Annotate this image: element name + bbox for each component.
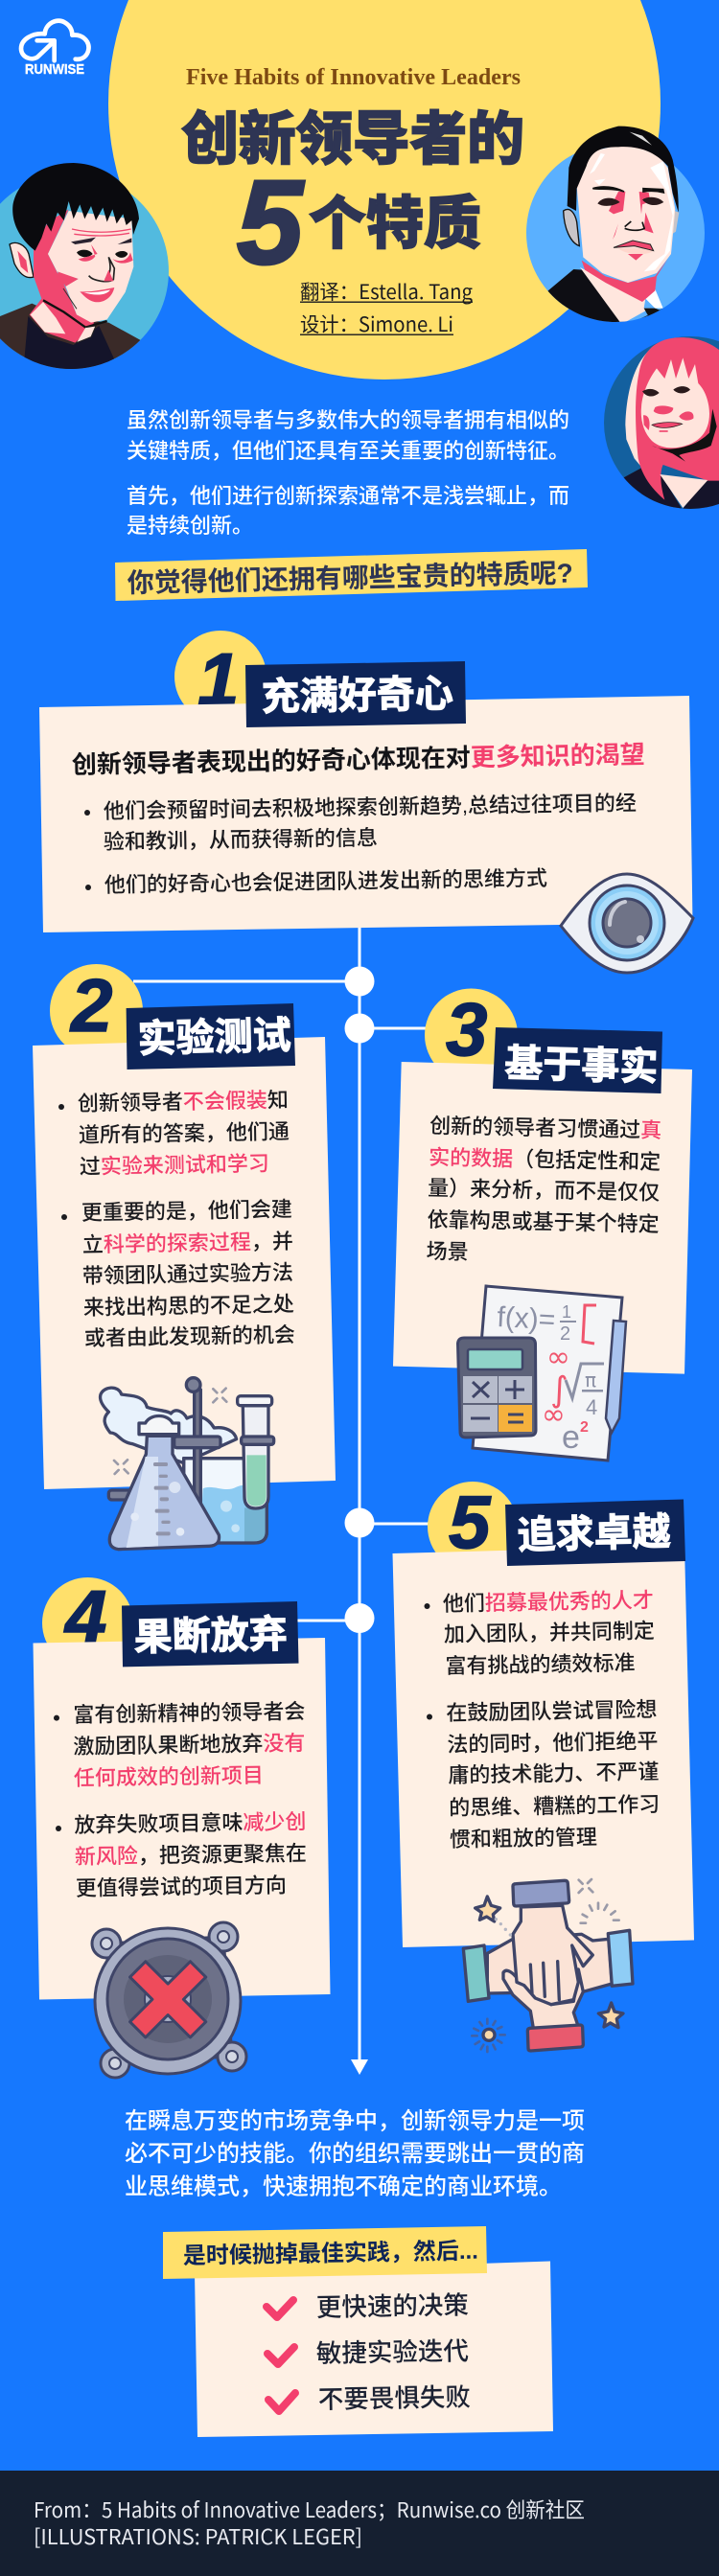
panel: habit 4 drop: 任何成效的创新项目 [74, 1763, 264, 1790]
panel: habit 5 excellence: 在鼓励团队尝试冒险想 [446, 1697, 658, 1725]
logo: Runwise [21, 21, 88, 78]
panel: habit 3 facts [393, 987, 692, 1460]
vertical timeline with nodes and arrow [133, 920, 429, 2075]
icon: eye [561, 874, 693, 973]
intro text: 是持续创新。 [127, 514, 253, 538]
panel: habit 2 experiment: 或者由此发现新的机会 [84, 1322, 295, 1350]
panel: habit 1 curiosity: 验和教训，从而获得新的信息 [104, 826, 378, 854]
panel: habit 4 drop [33, 1575, 330, 2078]
icon: formula sheet and calculator: π [585, 1368, 596, 1392]
icon: formula sheet and calculator: 1 [562, 1302, 571, 1322]
icon: formula sheet and calculator: 4 [586, 1395, 597, 1419]
panel: habit 2 experiment: 实验测试 [137, 1015, 291, 1061]
panel: habit 4 drop: 4 [63, 1575, 106, 1659]
icon: lab flask and test tube [101, 1378, 274, 1550]
panel: habit 3 facts: 量）来分析，而不是仅仅 [428, 1176, 660, 1205]
panel: habit 2 experiment: 创新领导者不会假装知 [78, 1088, 289, 1116]
footer: [ILLUSTRATIONS: PATRICK LEGER] [34, 2520, 362, 2551]
panel: habit 3 facts: 场景 [426, 1239, 469, 1264]
intro text: 虽然创新领导者与多数伟大的领导者拥有相似的 [127, 408, 569, 432]
panel: habit 5 excellence: 的思维、糟糕的工作习 [449, 1792, 660, 1820]
panel: habit 4 drop: 富有创新精神的领导者会 [73, 1699, 306, 1727]
intro text [127, 408, 569, 538]
panel: habit 5 excellence: 追求卓越 [517, 1511, 671, 1557]
closing text: 必不可少的技能。你的组织需要跳出一贯的商 [125, 2141, 585, 2167]
panel: habit 4 drop: 新风险，把资源更聚焦在 [75, 1841, 307, 1869]
panel: habit 3 facts: 3 [446, 987, 487, 1071]
panel: habit 5 excellence [393, 1480, 694, 2052]
panel: habit 3 facts: 实的数据（包括定性和定 [429, 1145, 661, 1174]
icon: formula sheet and calculator [458, 1286, 626, 1460]
panel: habit 1 curiosity: 1 [197, 637, 239, 722]
panel: habit 4 drop: 激励团队果断地放弃没有 [73, 1731, 306, 1759]
logo: Runwise: RUNWISE [25, 61, 84, 78]
panel: habit 4 drop: 果断放弃 [133, 1614, 288, 1659]
credits: 设计：Simone. Li [300, 310, 453, 338]
panel: habit 2 experiment: 立科学的探索过程，并 [82, 1230, 293, 1256]
credits: 翻译：Estella. Tang [300, 277, 473, 306]
panel: habit 3 facts: 依靠构思或基于某个特定 [427, 1208, 660, 1236]
portrait: left man [0, 163, 169, 381]
english subtitle: Five Habits of Innovative Leaders [186, 65, 521, 90]
icon: formula sheet and calculator: f(x)= [497, 1301, 556, 1336]
panel: habit 1 curiosity: 充满好奇心 [261, 674, 453, 719]
icon: formula sheet and calculator: ∞ [546, 1341, 570, 1374]
icon: formula sheet and calculator: e [562, 1419, 580, 1456]
panel: habit 5 excellence: 惯和粗放的管理 [450, 1825, 597, 1852]
intro text: 首先，他们进行创新探索通常不是浅尝辄止，而 [127, 484, 569, 508]
icon: speaker with red cross [92, 1922, 246, 2078]
title [181, 107, 524, 289]
panel: habit 2 experiment: 带领团队通过实验方法 [82, 1260, 293, 1288]
closing text: 业思维模式，快速拥抱不确定的商业环境。 [125, 2174, 562, 2200]
panel: habit 2 experiment: 2 [69, 963, 112, 1047]
panel: habit 5 excellence: 加入团队，并共同制定 [444, 1619, 655, 1646]
panel: checklist: 更快速的决策 [316, 2290, 469, 2322]
panel: habit 2 experiment: 更重要的是，他们会建 [81, 1197, 292, 1225]
portrait: center-right man [526, 126, 705, 322]
panel: habit 5 excellence: 法的同时，他们拒绝平 [447, 1729, 659, 1757]
portrait: lower-right woman [604, 336, 719, 516]
panel: habit 1 curiosity [39, 631, 693, 973]
panel: habit 3 facts: 基于事实 [504, 1043, 659, 1089]
icon: formula sheet and calculator: ∫ [550, 1370, 568, 1410]
panel: habit 5 excellence: 他们招募最优秀的人才 [443, 1588, 654, 1616]
icon: formula sheet and calculator: ∞ [542, 1398, 566, 1432]
panel: habit 2 experiment [33, 963, 336, 1550]
panel: habit 3 facts: 创新的领导者习惯通过真 [429, 1114, 661, 1142]
question banner: 你觉得他们还拥有哪些宝贵的特质呢? [127, 558, 573, 598]
footer: From：5 Habits of Innovative Leaders；Runwise.co 创新社区 [34, 2494, 585, 2524]
intro text: 关键特质，但他们还具有至关重要的创新特征。 [127, 439, 569, 463]
icon: formula sheet and calculator: 2 [560, 1323, 570, 1345]
panel: habit 2 experiment: 过实验来测试和学习 [80, 1152, 269, 1179]
panel: habit 4 drop: 更值得尝试的项目方向 [76, 1874, 287, 1900]
checklist heading banner [163, 2226, 487, 2279]
checklist heading banner: 是时候抛掉最佳实践，然后... [183, 2239, 478, 2269]
icon: stacked hands [463, 1879, 633, 2052]
title: 5 [237, 157, 305, 289]
panel: habit 1 curiosity: 他们的好奇心也会促进团队进发出新的思维方式 [104, 866, 547, 897]
panel: checklist: 不要畏惧失败 [318, 2382, 471, 2414]
header yellow circle [108, 0, 661, 380]
closing text [125, 2108, 585, 2200]
panel: habit 2 experiment: 道所有的答案，他们通 [79, 1119, 290, 1147]
panel: habit 5 excellence: 5 [449, 1480, 492, 1564]
icon: formula sheet and calculator: 2 [580, 1419, 589, 1436]
panel: habit 1 curiosity: 创新领导者表现出的好奇心体现在对更多知识的渴望 [72, 740, 645, 779]
title: 创新领导者的 [181, 107, 524, 172]
panel: checklist: 敏捷实验迭代 [316, 2336, 469, 2368]
closing text: 在瞬息万变的市场竞争中，创新领导力是一项 [125, 2108, 585, 2134]
panel: habit 1 curiosity: 他们会预留时间去积极地探索创新趋势,总结过往项目的经 [104, 791, 637, 823]
footer [0, 2471, 719, 2576]
panel: checklist [163, 2226, 553, 2437]
panel: habit 4 drop: 放弃失败项目意味减少创 [74, 1809, 307, 1837]
title: 个特质 [309, 192, 481, 256]
panel: habit 5 excellence: 庸的技术能力、不严谨 [448, 1760, 660, 1787]
credits [300, 277, 473, 338]
panel: habit 2 experiment: 来找出构思的不足之处 [83, 1292, 294, 1320]
panel: habit 5 excellence: 富有挑战的绩效标准 [445, 1651, 636, 1678]
